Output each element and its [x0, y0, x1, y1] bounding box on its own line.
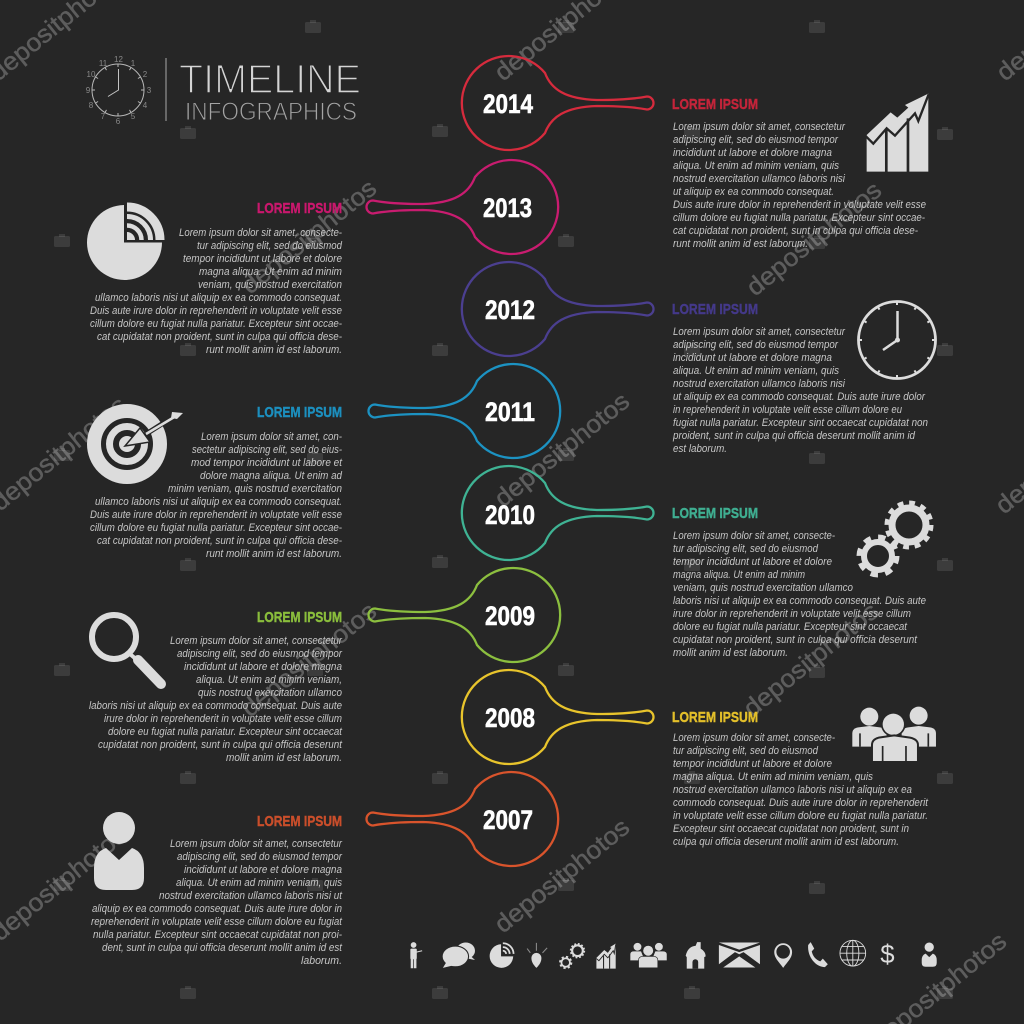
body text: Lorem ipsum dolor sit amet, con- — [201, 431, 342, 443]
body text: in reprehenderit in voluptate velit esse cillum dolore eu — [673, 404, 902, 416]
body text: reprehenderit in voluptate velit esse cillum dolore eu fugiat — [91, 916, 343, 928]
icon: small clock: 7 — [101, 112, 106, 121]
heading: LOREM IPSUM — [257, 404, 342, 421]
body text — [673, 121, 926, 250]
body text: veniam, quis nostrud exercitation ullamco — [673, 582, 853, 594]
body text: cillum dolore eu fugiat nulla pariatur. Excepteur sint occae- — [673, 212, 925, 224]
heading: LOREM IPSUM — [672, 96, 758, 113]
watermark text: depositphotos — [738, 597, 884, 723]
body text: aliqua. Ut enim ad minim veniam, quis — [673, 160, 839, 172]
body text: Duis aute irure dolor in reprehenderit in voluptate velit esse — [90, 305, 342, 317]
icon: small clock: 1 — [131, 59, 136, 68]
body text — [90, 227, 343, 356]
icon: phone — [808, 942, 828, 967]
body text — [91, 838, 343, 967]
icon: small clock — [86, 55, 152, 126]
body text: tur adipiscing elit, sed do eiusmod — [197, 240, 343, 252]
body text: proident, sunt in culpa qui officia deserunt mollit anim id — [672, 430, 916, 442]
body text: quis nostrud exercitation ullamco — [198, 687, 342, 699]
body text: ullamco laboris nisi ut aliquip ex ea commodo consequat. — [95, 496, 342, 508]
title block — [86, 55, 361, 126]
timeline node: 2007: 2007 — [483, 805, 533, 835]
body text: magna aliqua. Ut enim ad minim veniam, quis — [673, 771, 873, 783]
body text: in voluptate velit esse cillum dolore eu fugiat nulla pariatur. — [673, 810, 928, 822]
body text: dolore eu fugiat nulla pariatur. Excepteur sint occaecat — [673, 621, 908, 633]
body text: sectetur adipiscing elit, sed do eius- — [192, 444, 342, 456]
icon: small gears — [560, 944, 584, 968]
body text: cat cupidatat non proident, sunt in culpa qui officia dese- — [673, 225, 918, 237]
icon: globe — [840, 940, 866, 966]
body text: tur adipiscing elit, sed do eiusmod — [673, 543, 819, 555]
icon: presenter — [410, 942, 422, 968]
body text: cupidatat non proident, sunt in culpa qui officia deserunt — [673, 634, 918, 646]
icon: target with arrow — [94, 411, 183, 477]
timeline node: 2010 — [462, 466, 654, 560]
body text: culpa qui officia deserunt mollit anim id est laborum. — [673, 836, 899, 848]
body text: Lorem ipsum dolor sit amet, consectetur — [170, 635, 343, 647]
icon: magnifier — [92, 615, 161, 684]
timeline node: 2013 — [366, 160, 558, 254]
body text: Lorem ipsum dolor sit amet, consectetur — [170, 838, 343, 850]
watermark text: depositphotos — [741, 176, 887, 302]
body text: Lorem ipsum dolor sit amet, consecte- — [179, 227, 342, 239]
body text: aliqua. Ut enim ad minim veniam, quis — [673, 365, 839, 377]
icon: gears — [859, 503, 931, 575]
timeline node: 2007 — [366, 772, 558, 866]
icon: wall clock — [858, 302, 936, 378]
body text: nostrud exercitation ullamco laboris nisi — [673, 173, 845, 185]
icon: envelope — [719, 942, 760, 967]
heading: LOREM IPSUM — [672, 301, 758, 318]
icon: small clock: 4 — [143, 101, 148, 110]
body text: magna aliqua. Ut enim ad minim — [673, 569, 805, 581]
body text: Duis aute irure dolor in reprehenderit in voluptate velit esse — [673, 199, 926, 211]
body text: tur adipiscing elit, sed do eiusmod — [673, 745, 819, 757]
timeline node: 2012 — [462, 262, 654, 356]
icon: pie chart with signal arcs — [87, 205, 162, 280]
icon: pie chart — [490, 943, 514, 968]
timeline node: 2012: 2012 — [485, 295, 535, 325]
icon: small clock: 12 — [114, 55, 123, 64]
timeline node: 2008: 2008 — [485, 703, 535, 733]
body text: adipiscing elit, sed do eiusmod tempor — [177, 851, 343, 863]
panel: 2009 text — [89, 609, 343, 764]
timeline node: 2011 — [368, 364, 560, 458]
icon: small chart — [596, 944, 616, 969]
body text: tempor incididunt ut labore et dolore — [183, 253, 342, 265]
heading: LOREM IPSUM — [672, 709, 758, 726]
body text: est laborum. — [673, 443, 727, 455]
body text: veniam, quis nostrud exercitation — [198, 279, 342, 291]
panel: 2012 text — [672, 301, 928, 455]
watermark text: depositphotos — [236, 174, 382, 300]
timeline node: 2011: 2011 — [485, 397, 535, 427]
body text — [672, 326, 928, 455]
body text: mollit anim id est laborum. — [673, 647, 788, 659]
heading: infographics: INFOGRAPHICS — [185, 98, 357, 126]
heading: timeline: TIMELINE — [179, 56, 361, 102]
body text: irure dolor in reprehenderit in voluptate velit esse cillum — [673, 608, 911, 620]
body text: aliquip ex ea commodo consequat. Duis aute irure dolor in — [92, 903, 342, 915]
timeline node: 2009 — [368, 568, 560, 662]
panel: 2010 text — [672, 505, 926, 659]
body text: runt mollit anim id est laborum. — [673, 238, 808, 250]
panel: 2014 text — [672, 96, 926, 250]
timeline node: 2014: 2014 — [483, 89, 533, 119]
body text: Lorem ipsum dolor sit amet, consectetur — [673, 121, 846, 133]
icon: small clock: 8 — [89, 101, 94, 110]
body text: nostrud exercitation ullamco laboris nisi ut aliquip ex ea — [673, 784, 912, 796]
body text: incididunt ut labore et dolore magna — [673, 147, 832, 159]
body text: incididunt ut labore et dolore magna — [184, 864, 342, 876]
body text: Lorem ipsum dolor sit amet, consectetur — [673, 326, 846, 338]
icon: light bulb — [527, 943, 547, 968]
body text: dent, sunt in culpa qui officia deserunt mollit anim id est — [102, 942, 343, 954]
body text: nostrud exercitation ullamco laboris nisi ut — [159, 890, 343, 902]
body text: ullamco laboris nisi ut aliquip ex ea commodo consequat. — [95, 292, 342, 304]
heading: LOREM IPSUM — [257, 813, 342, 830]
body text: laborum. — [301, 955, 342, 967]
icon: dollar sign: $ — [880, 941, 895, 969]
body text: Excepteur sint occaecat cupidatat non proident, sunt in — [673, 823, 909, 835]
timeline node: 2014 — [462, 56, 654, 150]
body text: adipiscing elit, sed do eiusmod tempor — [177, 648, 343, 660]
heading: LOREM IPSUM — [257, 609, 342, 626]
icon: small clock: 3 — [147, 86, 152, 95]
icon: group of people — [852, 707, 936, 762]
body text: dolore magna aliqua. Ut enim ad — [200, 470, 343, 482]
icon: rising chart — [865, 94, 929, 172]
body text — [673, 530, 926, 659]
body text — [673, 732, 929, 848]
body text: runt mollit anim id est laborum. — [206, 344, 342, 356]
heading: LOREM IPSUM — [672, 505, 758, 522]
body text: cupidatat non proident, sunt in culpa qui officia deserunt — [98, 739, 343, 751]
body text: ut aliquip ex ea commodo consequat. — [673, 186, 834, 198]
body text: mod tempor incididunt ut labore et — [191, 457, 343, 469]
body text: laboris nisi ut aliquip ex ea commodo consequat. Duis aute — [89, 700, 342, 712]
body text: adipiscing elit, sed do eiusmod tempor — [673, 339, 839, 351]
panel: 2008 text — [672, 709, 929, 848]
watermark text: depositphotos — [489, 813, 635, 939]
body text — [90, 431, 343, 560]
icon row — [410, 940, 937, 969]
body text: adipiscing elit, sed do eiusmod tempor — [673, 134, 839, 146]
body text: dolore eu fugiat nulla pariatur. Excepteur sint occaecat — [108, 726, 343, 738]
icon: small clock: 11 — [99, 59, 108, 68]
icon: person — [94, 812, 144, 890]
body text: cat cupidatat non proident, sunt in culpa qui officia dese- — [97, 331, 342, 343]
body text: tempor incididunt ut labore et dolore — [673, 556, 832, 568]
title divider — [166, 58, 167, 121]
body text: cat cupidatat non proident, sunt in culpa qui officia dese- — [97, 535, 342, 547]
body text — [89, 635, 343, 764]
body text: nulla pariatur. Excepteur sint occaecat cupidatat non proi- — [93, 929, 342, 941]
body text: magna aliqua. Ut enim ad minim — [199, 266, 342, 278]
timeline node: 2010: 2010 — [485, 500, 535, 530]
icon: small person — [922, 942, 937, 967]
heading: LOREM IPSUM — [257, 200, 342, 217]
body text: tempor incididunt ut labore et dolore — [673, 758, 832, 770]
body text: Lorem ipsum dolor sit amet, consecte- — [673, 530, 835, 542]
icon: speech bubbles — [442, 942, 475, 968]
body text: nostrud exercitation ullamco laboris nisi — [673, 378, 845, 390]
icon: small clock: 5 — [131, 112, 136, 121]
body text: Duis aute irure dolor in reprehenderit in voluptate velit esse — [90, 509, 342, 521]
icon: small clock: 10 — [87, 70, 96, 79]
body text: incididunt ut labore et dolore magna — [184, 661, 342, 673]
body text: Lorem ipsum dolor sit amet, consecte- — [673, 732, 835, 744]
timeline node: 2009: 2009 — [485, 601, 535, 631]
icon: map pin — [774, 943, 792, 968]
icon: small people — [630, 943, 667, 968]
body text: cillum dolore eu fugiat nulla pariatur. Excepteur sint occae- — [90, 318, 342, 330]
panel: 2007 text — [91, 813, 343, 967]
panel: 2013 text — [90, 200, 343, 356]
icon: small clock: 6 — [116, 117, 121, 126]
body text: minim veniam, quis nostrud exercitation — [168, 483, 342, 495]
timeline node: 2013: 2013 — [483, 193, 532, 223]
body text: irure dolor in reprehenderit in voluptate velit esse cillum — [104, 713, 342, 725]
icon: house — [686, 942, 706, 969]
body text: cillum dolore eu fugiat nulla pariatur. Excepteur sint occae- — [90, 522, 342, 534]
body text: laboris nisi ut aliquip ex ea commodo consequat. Duis aute — [673, 595, 926, 607]
icon: small clock: 2 — [143, 70, 148, 79]
body text: aliqua. Ut enim ad minim veniam, quis — [176, 877, 342, 889]
body text: incididunt ut labore et dolore magna — [673, 352, 832, 364]
body text: ut aliquip ex ea commodo consequat. Duis aute irure dolor — [673, 391, 926, 403]
icon: small clock: 9 — [86, 86, 91, 95]
body text: aliqua. Ut enim ad minim veniam, — [196, 674, 342, 686]
body text: runt mollit anim id est laborum. — [206, 548, 342, 560]
body text: fugiat nulla pariatur. Excepteur sint occaecat cupidatat non — [673, 417, 928, 429]
timeline node: 2008 — [462, 670, 654, 764]
body text: mollit anim id est laborum. — [226, 752, 342, 764]
watermark text: depositphotos — [489, 387, 635, 513]
body text: commodo consequat. Duis aute irure dolor in reprehenderit — [673, 797, 929, 809]
watermark text: depositphotos — [236, 597, 382, 723]
panel: 2011 text — [90, 404, 343, 560]
